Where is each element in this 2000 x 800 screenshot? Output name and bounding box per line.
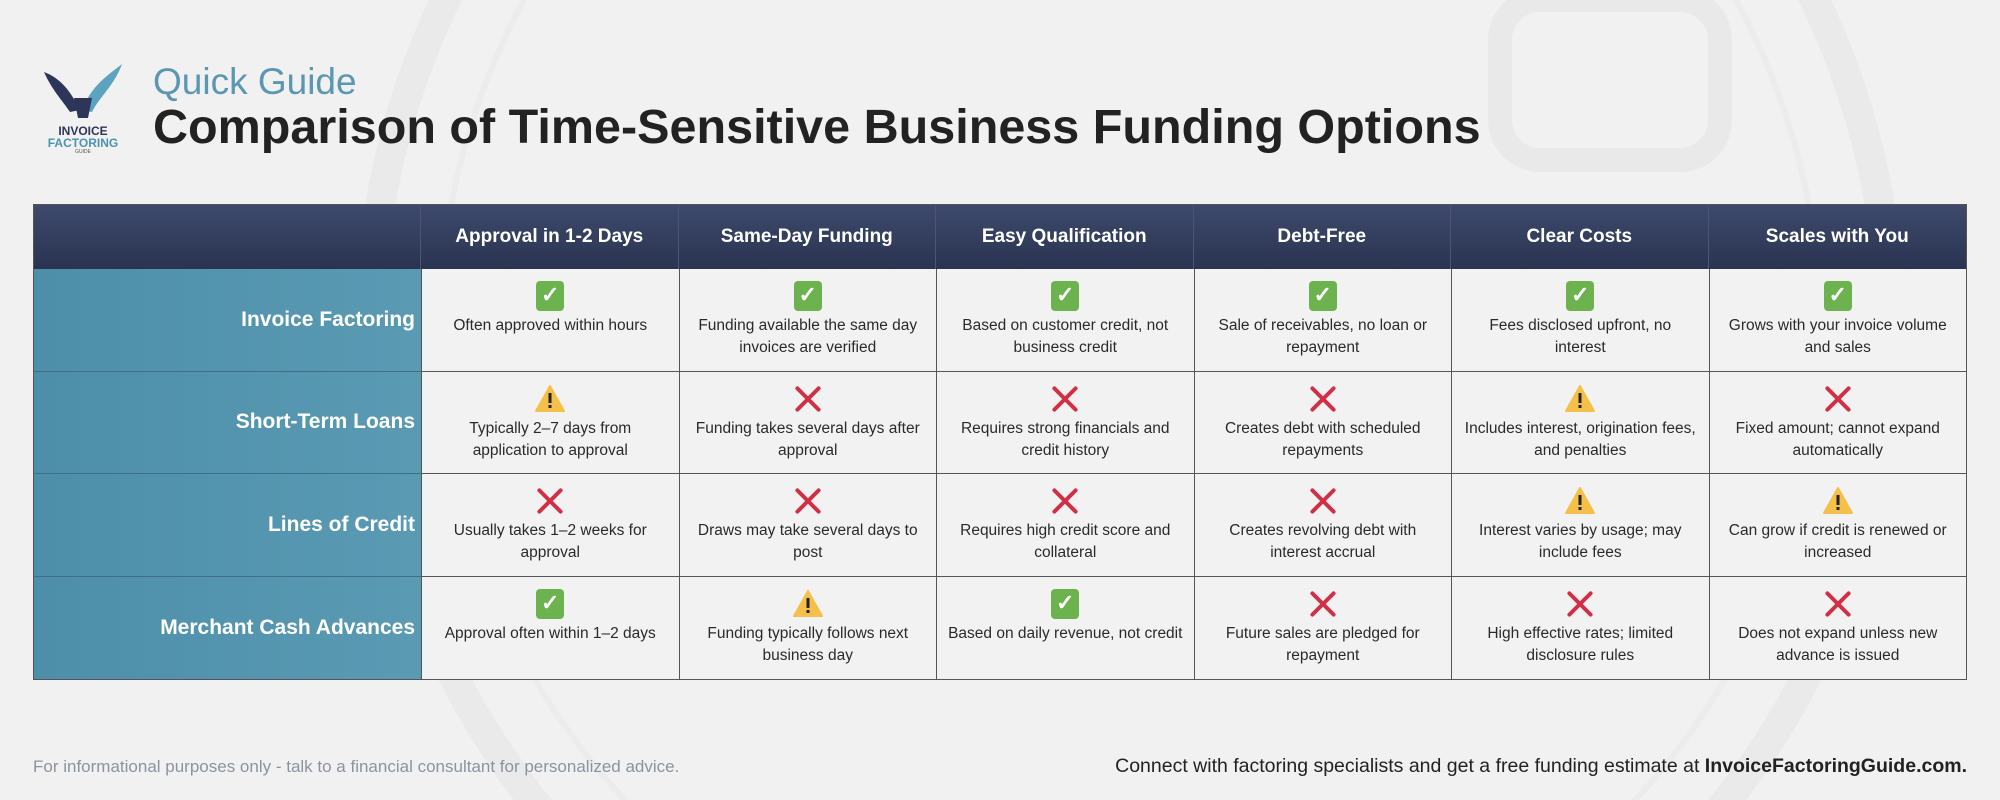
comparison table: Does not expand unless new advance is issued (1738, 624, 1937, 664)
comparison table: ✓ (1571, 282, 1589, 307)
comparison table: Same-Day Funding (721, 226, 893, 247)
comparison table: Includes interest, origination fees, and penalties (1465, 420, 1696, 458)
comparison table: Often approved within hours (453, 317, 647, 334)
comparison table: Approval in 1-2 Days (455, 226, 643, 247)
title: Comparison of Time-Sensitive Business Funding Options (153, 100, 1481, 154)
comparison table: ✓ (1314, 282, 1332, 307)
logo: INVOICE (58, 124, 108, 138)
comparison table: Usually takes 1–2 weeks for approval (454, 522, 647, 561)
logo: FACTORING (48, 136, 118, 150)
logo (44, 64, 122, 155)
comparison table: Funding takes several days after approval (696, 420, 920, 458)
text: GUIDE (75, 149, 91, 155)
comparison table: ✓ (1829, 282, 1847, 307)
comparison table: Requires strong financials and credit history (961, 420, 1170, 458)
comparison table: Funding typically follows next business day (707, 624, 908, 664)
comparison table: Can grow if credit is renewed or increased (1729, 522, 1947, 561)
comparison table (33, 204, 1967, 680)
comparison table: Interest varies by usage; may include fees (1479, 522, 1681, 561)
comparison table: Scales with You (1766, 226, 1909, 247)
comparison table: Fixed amount; cannot expand automatically (1736, 420, 1940, 458)
comparison table: Lines of Credit (268, 513, 415, 536)
comparison table: ✓ (1056, 590, 1074, 614)
comparison table: Creates debt with scheduled repayments (1225, 420, 1421, 458)
comparison table: ✓ (1056, 282, 1074, 307)
comparison table: Funding available the same day invoices are verified (698, 317, 917, 356)
comparison table: Easy Qualification (982, 226, 1147, 247)
subtitle: Quick Guide (153, 61, 357, 102)
comparison table: Sale of receivables, no loan or repayment (1218, 317, 1427, 356)
comparison table: Merchant Cash Advances (160, 616, 415, 639)
comparison table: Approval often within 1–2 days (445, 624, 656, 642)
comparison table: ✓ (799, 282, 817, 307)
comparison table: Requires high credit score and collateral (960, 522, 1170, 561)
comparison table: Based on customer credit, not business credit (962, 317, 1168, 356)
comparison table: Draws may take several days to post (698, 522, 918, 561)
comparison table: ✓ (541, 282, 559, 307)
comparison table: Debt-Free (1277, 226, 1366, 247)
comparison table: Typically 2–7 days from application to approval (469, 420, 631, 458)
footer call to action: Connect with factoring specialists and get a free funding estimate at InvoiceFactoringGuide.com. (1115, 755, 1967, 777)
footer disclaimer: For informational purposes only - talk to a financial consultant for personalized advice. (33, 757, 679, 776)
comparison table: Creates revolving debt with interest accrual (1229, 522, 1416, 561)
comparison table: Based on daily revenue, not credit (948, 624, 1182, 642)
comparison table: ✓ (541, 590, 559, 614)
comparison table: Invoice Factoring (241, 308, 415, 331)
comparison table: Short-Term Loans (236, 410, 415, 433)
comparison table: Clear Costs (1526, 226, 1632, 247)
comparison table: Fees disclosed upfront, no interest (1489, 317, 1671, 356)
comparison table: High effective rates; limited disclosure rules (1487, 624, 1673, 664)
comparison table: Future sales are pledged for repayment (1226, 624, 1420, 664)
comparison table: Grows with your invoice volume and sales (1729, 317, 1947, 356)
